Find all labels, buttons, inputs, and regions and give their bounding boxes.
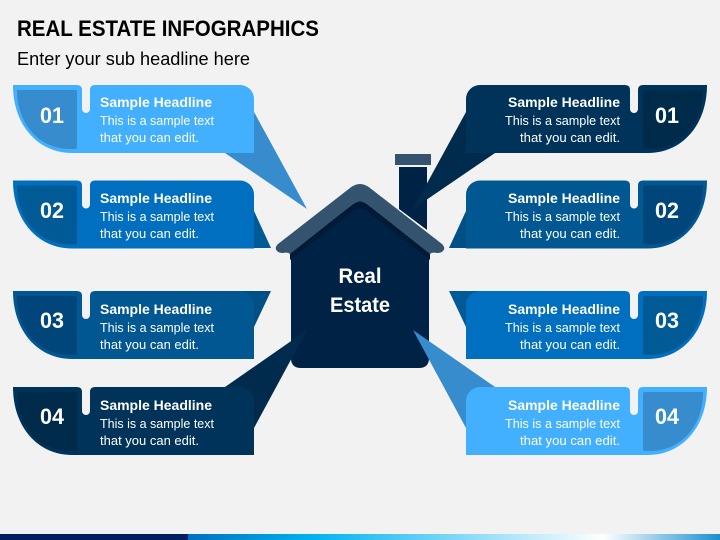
text: that you can edit. [100,130,199,145]
house [276,154,444,368]
text: This is a sample text [100,209,214,224]
text: Sample Headline [100,190,212,206]
card [466,85,707,153]
text: This is a sample text [100,416,214,431]
number: 02 [655,198,679,223]
text: Sample Headline [100,94,212,110]
text [100,397,214,448]
number: 01 [655,103,679,128]
roof shadow [290,202,430,260]
text: Sample Headline [508,301,620,317]
text: that you can edit. [100,433,199,448]
footer bar [0,534,720,540]
panel: right 02 [449,180,707,248]
text: This is a sample text [100,320,214,335]
text: that you can edit. [520,130,620,145]
number box [17,392,77,451]
number box [17,186,77,244]
text [505,190,620,241]
card [13,85,254,153]
text: This is a sample text [505,209,620,224]
pointer [225,112,307,209]
text: This is a sample text [505,320,620,335]
pointer [413,112,495,209]
card [13,387,254,455]
chimney [395,154,431,231]
text [505,94,620,145]
number box [643,186,703,244]
text: This is a sample text [100,113,214,128]
text: This is a sample text [505,113,620,128]
pointer [240,211,271,248]
text [100,301,214,352]
text: Sample Headline [508,190,620,206]
card [466,291,707,359]
number box [17,90,77,149]
number: 03 [40,308,64,333]
card [466,180,707,248]
number: 04 [655,404,680,429]
panel: left 03 [13,291,271,359]
pointer [413,330,495,428]
roof [276,184,444,254]
house body [291,200,429,368]
text: Sample Headline [508,94,620,110]
house label: Real [338,265,382,288]
number: 04 [40,404,65,429]
text: that you can edit. [520,433,620,448]
pointer [449,211,480,248]
pointer [222,291,271,327]
text: that you can edit. [100,226,199,241]
text [505,397,620,448]
pointer [225,330,307,428]
number box [643,296,703,355]
panel: left 04 [13,330,307,455]
text: that you can edit. [100,337,199,352]
house: Estate [330,294,390,317]
text: that you can edit. [520,337,620,352]
number: 01 [40,103,64,128]
number box [17,296,77,355]
text: Sample Headline [100,397,212,413]
pointer [449,291,498,327]
panel: left 02 [13,180,271,248]
text: Sample Headline [508,397,620,413]
card [13,180,254,248]
number: 02 [40,198,64,223]
text [505,301,620,352]
card [466,387,707,455]
text: Sample Headline [100,301,212,317]
panel: left 01 [13,85,307,209]
panel: right 03 [449,291,707,359]
text [100,94,214,145]
text: that you can edit. [520,226,620,241]
number box [643,392,703,451]
subtitle: Enter your sub headline here [17,49,250,69]
number: 03 [655,308,679,333]
text: This is a sample text [505,416,620,431]
text [100,190,214,241]
card [13,291,254,359]
panel: right 01 [413,85,707,209]
number box [643,90,703,149]
panel: right 04 [413,330,707,455]
title: REAL ESTATE INFOGRAPHICS [17,16,319,41]
